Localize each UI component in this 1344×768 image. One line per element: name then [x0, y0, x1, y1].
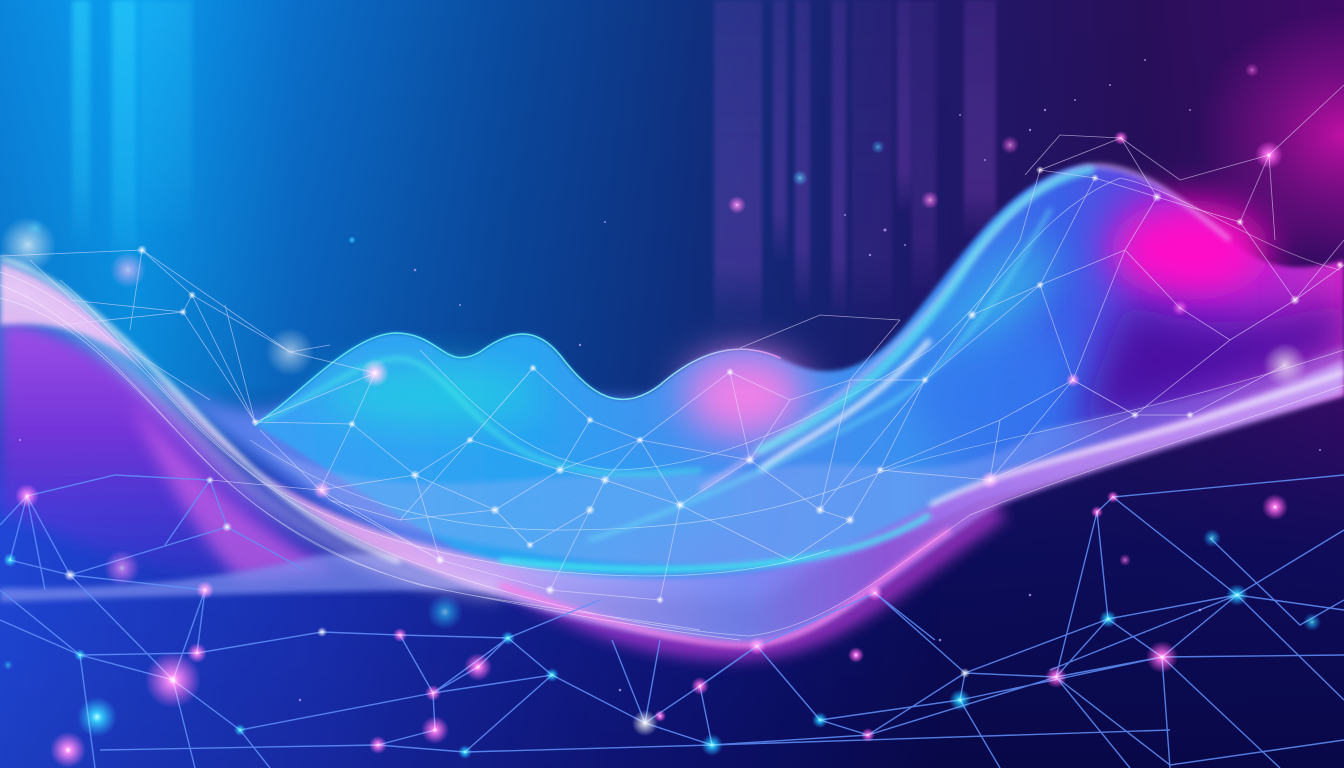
left violet haze below ribbon [0, 320, 330, 580]
wave: blue underlay joining body and ribbon [170, 385, 960, 600]
wave: dark violet fold [1080, 300, 1344, 430]
glow nodes: white [0, 166, 1344, 736]
pink glow beneath left ribbon [130, 400, 340, 580]
wave: lower left blue band [0, 554, 560, 602]
ribbon strands: fine white threads [0, 178, 1344, 640]
wave: translucent lilac band [250, 345, 1344, 566]
light streaks: cyan [72, 0, 192, 270]
wave: teal crest lines [255, 170, 1090, 540]
ribbon: pink main [0, 166, 1344, 650]
mesh lines: upper and central network [0, 85, 1344, 600]
light streaks: violet [714, 0, 996, 330]
mesh lines: lower network [0, 475, 1344, 768]
wave: blue central body [255, 165, 1344, 583]
glow nodes: cyan [3, 140, 1321, 759]
